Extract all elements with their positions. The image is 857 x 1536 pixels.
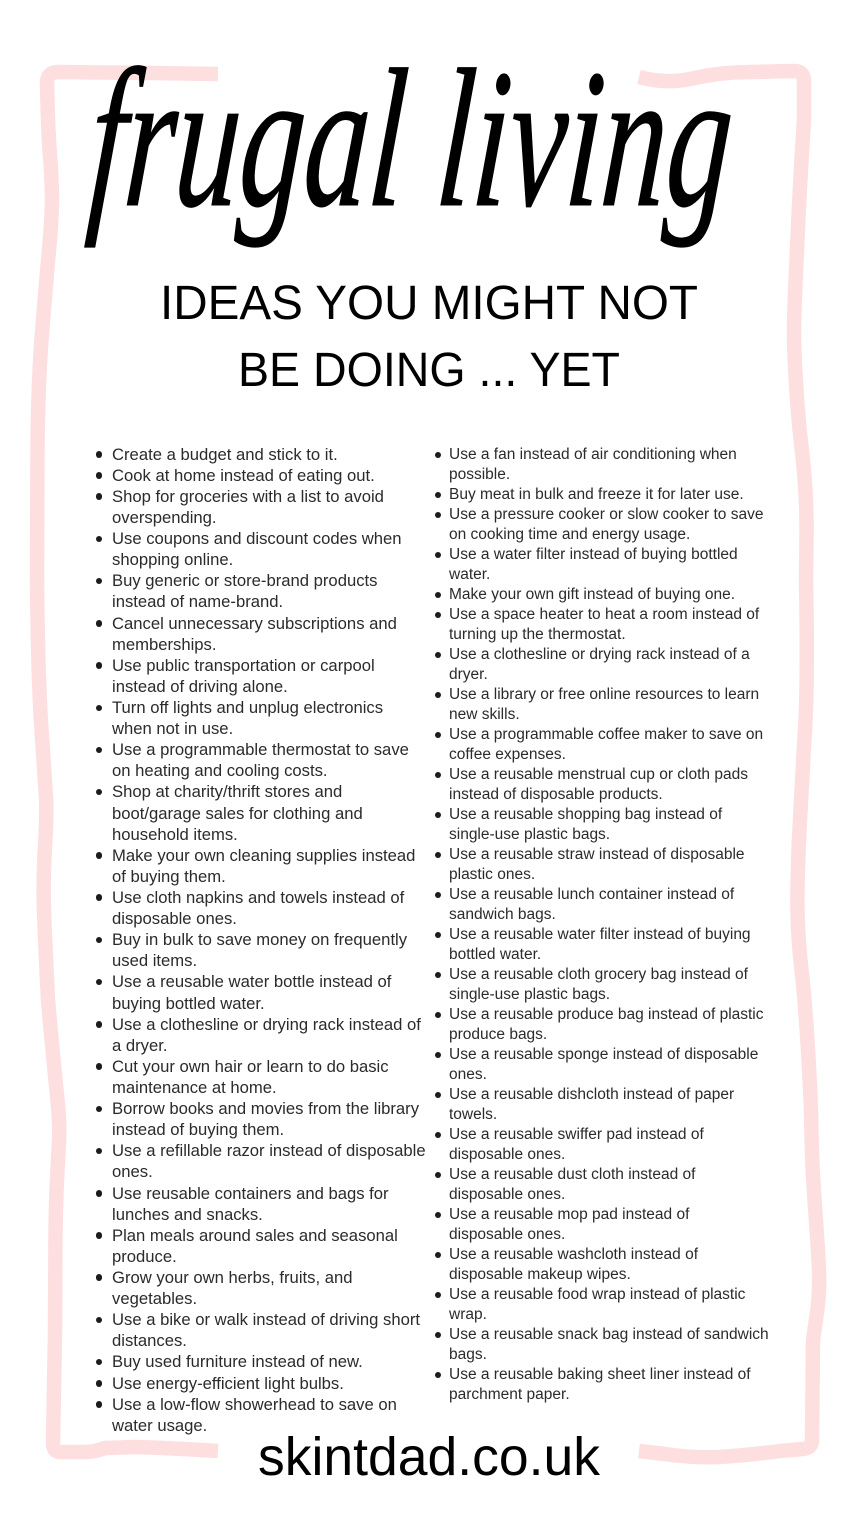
left column tips list: buying bottled water. [112, 994, 265, 1013]
right column tips list: Use a reusable straw instead of disposable [449, 846, 745, 863]
left column tips list: memberships. [112, 635, 216, 654]
right column tips list: Use a reusable water filter instead of buying [449, 926, 751, 943]
left column tips list: ones. [112, 1162, 153, 1181]
left column tips list: Shop for groceries with a list to avoid [112, 487, 384, 506]
title: frugal living: frugal living [83, 30, 740, 249]
right column tips list: wrap. [449, 1306, 487, 1323]
left column tips list: Grow your own herbs, fruits, and [112, 1268, 352, 1287]
right column tips list: disposable ones. [449, 1226, 565, 1243]
right column tips list: new skills. [449, 706, 520, 723]
right column tips list: bottled water. [449, 946, 541, 963]
right column tips list: disposable ones. [449, 1186, 565, 1203]
left column tips list: Use public transportation or carpool [112, 656, 375, 675]
right column tips list: Use a fan instead of air conditioning when [449, 446, 737, 463]
right column tips list: parchment paper. [449, 1386, 570, 1403]
left column tips list: of buying them. [112, 867, 226, 886]
frame: left side with top and bottom stubs [37, 72, 218, 1452]
left column tips list: Use a low-flow showerhead to save on [112, 1395, 397, 1414]
left column tips list: disposable ones. [112, 909, 237, 928]
left column tips list: Turn off lights and unplug electronics [112, 698, 383, 717]
right column tips list: Use a reusable cloth grocery bag instead of [449, 966, 748, 983]
right column tips list: Use a reusable snack bag instead of sandwich [449, 1326, 769, 1343]
left column tips list: on heating and cooling costs. [112, 761, 328, 780]
left column tips list: produce. [112, 1247, 177, 1266]
left column tips list: Use energy-efficient light bulbs. [112, 1374, 344, 1392]
right column tips list: Use a clothesline or drying rack instead of a [449, 646, 750, 663]
left column tips list: used items. [112, 951, 197, 970]
right column tips list: turning up the thermostat. [449, 626, 626, 643]
left column tips list: Use a refillable razor instead of disposable [112, 1141, 426, 1160]
right column tips list: Use a reusable produce bag instead of plastic [449, 1006, 764, 1023]
left column tips list: Borrow books and movies from the library [112, 1099, 419, 1118]
left column tips list: water usage. [112, 1416, 207, 1435]
left column tips list: when not in use. [112, 719, 233, 738]
left column tips list: Buy generic or store-brand products [112, 571, 377, 590]
right column tips list: on cooking time and energy usage. [449, 526, 690, 543]
left column tips list: Cut your own hair or learn to do basic [112, 1057, 389, 1076]
right column tips list: instead of disposable products. [449, 786, 663, 803]
left column tips list: Plan meals around sales and seasonal [112, 1226, 398, 1245]
left column tips list: instead of buying them. [112, 1120, 284, 1139]
right column tips list: ones. [449, 1066, 487, 1083]
left column tips list: distances. [112, 1331, 187, 1350]
left column tips list: Create a budget and stick to it. [112, 445, 338, 464]
left column tips list [96, 445, 426, 1435]
right column tips list: Use a reusable dust cloth instead of [449, 1166, 695, 1183]
subtitle line 1: IDEAS YOU MIGHT NOT [160, 277, 698, 330]
left column tips list: instead of name-brand. [112, 592, 283, 611]
left column tips list: shopping online. [112, 550, 233, 569]
right column tips list: Use a reusable menstrual cup or cloth pads [449, 766, 748, 783]
right column tips list: dryer. [449, 666, 488, 683]
left column tips list: Buy in bulk to save money on frequently [112, 930, 407, 949]
subtitle line 2: BE DOING ... YET [238, 344, 620, 397]
left column tips list: Cook at home instead of eating out. [112, 466, 375, 485]
left column tips list: lunches and snacks. [112, 1205, 263, 1224]
left column tips list: Use cloth napkins and towels instead of [112, 888, 404, 907]
right column tips list: produce bags. [449, 1026, 547, 1043]
right column tips list: Use a reusable sponge instead of disposable [449, 1046, 758, 1063]
right column tips list: Use a water filter instead of buying bottled [449, 546, 738, 563]
right column tips list: disposable makeup wipes. [449, 1266, 631, 1283]
right column tips list: Use a pressure cooker or slow cooker to save [449, 506, 763, 523]
right column tips list: possible. [449, 466, 510, 483]
right column tips list: Use a reusable mop pad instead of [449, 1206, 689, 1223]
left column tips list: Use a bike or walk instead of driving short [112, 1310, 420, 1329]
right column tips list: Use a space heater to heat a room instead of [449, 606, 759, 623]
right column tips list: Use a reusable food wrap instead of plastic [449, 1286, 745, 1303]
left column tips list: Use coupons and discount codes when [112, 529, 402, 548]
right column tips list [435, 446, 769, 1403]
right column tips list: disposable ones. [449, 1146, 565, 1163]
right column tips list: towels. [449, 1106, 497, 1123]
footer website: skintdad.co.uk [258, 1427, 601, 1487]
right column tips list: coffee expenses. [449, 746, 566, 763]
left column tips list: boot/garage sales for clothing and [112, 804, 363, 823]
right column tips list: sandwich bags. [449, 906, 556, 923]
left column tips list: vegetables. [112, 1289, 197, 1308]
left column tips list: Buy used furniture instead of new. [112, 1352, 363, 1371]
left column tips list: instead of driving alone. [112, 677, 288, 696]
right column tips list: Use a reusable shopping bag instead of [449, 806, 722, 823]
left column tips list: Use a reusable water bottle instead of [112, 972, 391, 991]
right column tips list: Use a reusable swiffer pad instead of [449, 1126, 704, 1143]
right column tips list: Make your own gift instead of buying one. [449, 586, 735, 603]
right column tips list: single-use plastic bags. [449, 986, 610, 1003]
right column tips list: Use a reusable dishcloth instead of paper [449, 1086, 734, 1103]
left column tips list: Make your own cleaning supplies instead [112, 846, 415, 865]
left column tips list: Use a clothesline or drying rack instead of [112, 1015, 421, 1034]
frame: right side with top and bottom stubs [639, 71, 819, 1457]
right column tips list: plastic ones. [449, 866, 535, 883]
left column tips list: a dryer. [112, 1036, 168, 1055]
right column tips list: bags. [449, 1346, 487, 1363]
left column tips list: Shop at charity/thrift stores and [112, 782, 342, 801]
right column tips list: Use a reusable washcloth instead of [449, 1246, 698, 1263]
right column tips list: water. [449, 566, 490, 583]
left column tips list: overspending. [112, 508, 217, 527]
right column tips list: Buy meat in bulk and freeze it for later use. [449, 486, 744, 503]
right column tips list: Use a library or free online resources to learn [449, 686, 759, 703]
right column tips list: Use a programmable coffee maker to save on [449, 726, 763, 743]
left column tips list: Use a programmable thermostat to save [112, 740, 409, 759]
right column tips list: Use a reusable lunch container instead of [449, 886, 734, 903]
right column tips list: Use a reusable baking sheet liner instead of [449, 1366, 751, 1383]
left column tips list: Cancel unnecessary subscriptions and [112, 614, 397, 633]
left column tips list: maintenance at home. [112, 1078, 277, 1097]
left column tips list: household items. [112, 825, 238, 844]
left column tips list: Use reusable containers and bags for [112, 1184, 389, 1203]
right column tips list: single-use plastic bags. [449, 826, 610, 843]
